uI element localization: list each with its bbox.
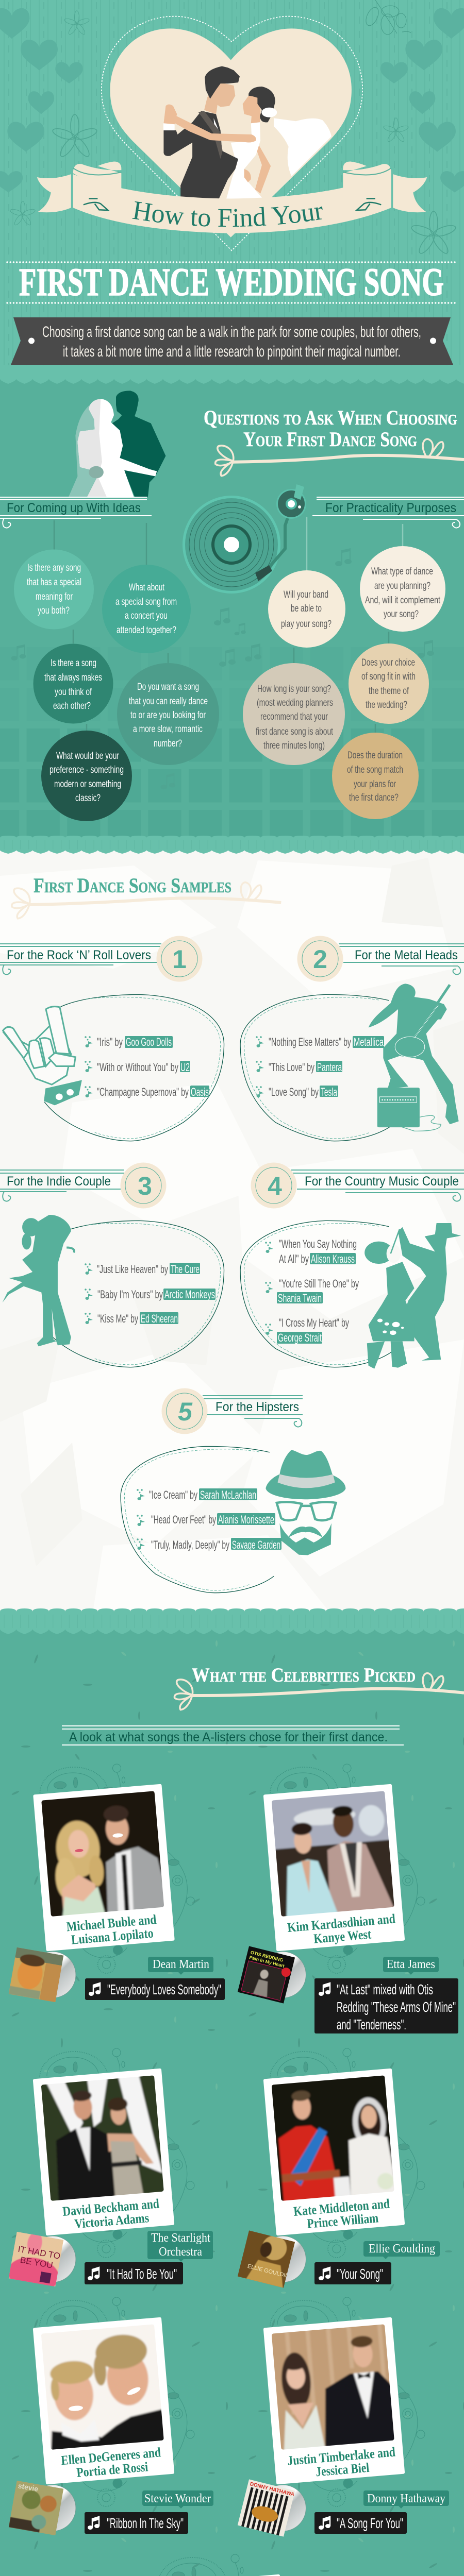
album: Otis Redding	[238, 1946, 306, 2004]
bubble: is there any song: Is there any song	[27, 563, 81, 573]
bubble: makes you think: Is there a song	[51, 658, 96, 669]
category 4 header	[251, 1162, 464, 1209]
subtitle: A look at what songs the A-listers chose for their first dance.	[69, 1730, 388, 1744]
bubble: preference: preference - something	[49, 765, 124, 775]
polaroid: Ellen DeGeneres and Portia de Rossi: Portia de Rossi	[76, 2459, 148, 2480]
illustration: dancing bride and groom	[163, 66, 332, 199]
floral decorations	[40, 1764, 425, 2576]
name label: Ellie Goulding	[363, 2241, 440, 2259]
song box: At Last	[314, 1978, 458, 2033]
song list: indie	[85, 1263, 216, 1325]
heading: how to find your	[132, 201, 323, 227]
heading: samples: First Dance Song Samples	[34, 874, 231, 897]
song list: metal	[256, 1036, 384, 1098]
illustration: country couple	[364, 1223, 461, 1369]
bubble: how long: How long is your song?	[257, 684, 331, 694]
bubble: dance or slow: to or are you looking for	[130, 710, 206, 721]
name label: Stevie Wonder	[142, 2490, 213, 2509]
bubble: preference: classic?	[75, 793, 101, 804]
bubble: concert song: a concert you	[125, 611, 168, 621]
bubble: is there any song: meaning for	[36, 591, 73, 602]
polaroid: David Beckham and Victoria Adams: Victoria Adams	[74, 2210, 150, 2231]
bubble: makes you think	[33, 644, 113, 723]
bubble: makes you think: each other?	[53, 701, 91, 711]
bubble: theme: of song fit in with	[361, 671, 416, 682]
polaroid: Ellen DeGeneres and Portia de Rossi: Ellen DeGeneres and	[60, 2445, 161, 2468]
heading: how to find your: How to Find Your	[132, 201, 323, 227]
polaroid: Kim Kardashian and Kanye West	[263, 1784, 405, 1951]
song list: indie: Ed Sheeran	[141, 1312, 178, 1325]
background flowers and leaves	[10, 0, 457, 256]
panel: questions to ask	[0, 365, 464, 855]
song list: rock: "Iris" by	[97, 1036, 123, 1048]
bubble: dance or slow: Do you want a song	[137, 682, 199, 692]
bubble: band: Will your band	[284, 589, 328, 600]
song list: country: George Strait	[278, 1331, 322, 1344]
cream heart	[110, 28, 352, 238]
bubble: dance or slow: a more slow, romantic	[133, 724, 203, 735]
song list: rock: "With or Without You" by	[97, 1061, 178, 1074]
ribbon bow	[12, 883, 281, 919]
polaroid: Michael Buble and Luisana Lopilato: Luisana Lopilato	[71, 1925, 154, 1947]
category 1 header	[0, 936, 202, 982]
bubble: duration: Does the duration	[347, 750, 403, 761]
heading: questions: Your First Dance Song	[243, 428, 417, 451]
category 3 header: 3	[138, 1172, 152, 1200]
category 1 header: 1	[172, 945, 187, 974]
vinyl record turntable	[183, 484, 306, 594]
name label: Ellie Goulding: Ellie Goulding	[369, 2242, 435, 2256]
strings	[54, 520, 389, 733]
bubble: theme: the wedding?	[366, 700, 407, 710]
dotted rules	[7, 262, 457, 303]
ribbon banner	[37, 162, 427, 233]
song list: country: "You're Still The One" by	[279, 1277, 359, 1290]
bubble: band: play your song?	[281, 619, 332, 630]
song box: A Song For You: "A Song For You"	[337, 2515, 403, 2531]
song list: country: At All" by	[279, 1252, 309, 1265]
album: It Had To Be You: BE YOU	[20, 2255, 54, 2270]
name label: Etta James	[383, 1957, 439, 1975]
bubble: how long: first dance song is about	[256, 726, 334, 737]
category 5 header: 5	[178, 1397, 193, 1426]
song list: rock: Goo Goo Dolls	[126, 1036, 172, 1048]
panel: header	[0, 0, 464, 365]
bubble: type of dance: your song?	[384, 609, 419, 620]
bubble: type of dance: are you planning?	[374, 581, 430, 591]
bubble: concert song: What about	[129, 582, 165, 593]
polaroid: Ellen DeGeneres and Portia de Rossi	[33, 2317, 174, 2484]
name label: Dean Martin	[148, 1957, 213, 1975]
category 4 header: 4	[268, 1172, 282, 1200]
bubble: duration	[332, 733, 419, 819]
name label: Stevie Wonder: Stevie Wonder	[144, 2492, 211, 2505]
category 3 header	[0, 1162, 166, 1209]
song list: rock: U2	[180, 1061, 190, 1074]
panel: first dance song samples	[0, 854, 464, 1613]
bubble: how long: (most wedding planners	[257, 698, 333, 708]
song list: hipsters: Sarah McLachlan	[200, 1488, 256, 1501]
polaroid: Michael Buble and Luisana Lopilato	[33, 1784, 175, 1951]
name label: Donny Hathaway	[363, 2490, 449, 2509]
name label: Etta James: Etta James	[387, 1958, 435, 1971]
bubble: type of dance: And, will it complement	[365, 595, 441, 606]
song list: country: Alison Krauss	[311, 1252, 355, 1265]
bubble: duration: the first dance?	[349, 792, 399, 803]
song list: rock: Oasis	[191, 1086, 209, 1098]
song box: Ribbon In The Sky: "Ribbon In The Sky"	[107, 2515, 184, 2531]
heading: celebrities: What the Celebrities Picked	[192, 1664, 416, 1686]
bubble: type of dance: What type of dance	[371, 566, 433, 577]
bubble: concert song	[102, 565, 191, 653]
illustration: rock hand	[3, 1007, 81, 1105]
polaroid: David Beckham and Victoria Adams: David Beckham and	[62, 2196, 160, 2219]
illustration: indie couple	[3, 1215, 74, 1346]
song list: country	[265, 1238, 359, 1344]
song list: indie: The Cure	[171, 1263, 200, 1276]
song list: hipsters: Alanis Morissette	[218, 1513, 274, 1526]
song list: country: "I Cross My Heart" by	[279, 1316, 349, 1329]
song box: Ribbon In The Sky	[85, 2512, 188, 2534]
ribbon bow	[216, 439, 464, 476]
song list: hipsters: "Truly, Madly, Deeply" by	[151, 1538, 229, 1551]
category 5 header	[162, 1388, 303, 1434]
bubble: how long	[243, 663, 345, 765]
album: Ellie Goulding	[237, 2229, 306, 2292]
polaroid: Kim Kardashian and Kanye West: Kanye West	[313, 1926, 372, 1946]
bubble: makes you think: you think of	[55, 687, 92, 698]
category 5 header: For the Hipsters	[216, 1400, 299, 1414]
song list: metal: Metallica	[354, 1036, 384, 1048]
song list: country: "When You Say Nothing	[279, 1238, 357, 1250]
bubble: dance or slow	[117, 663, 219, 765]
bubble: theme: the theme of	[369, 686, 409, 697]
polaroid: Justin Timberlake and Jessica Biel	[263, 2317, 405, 2484]
song box: Your Song	[314, 2262, 391, 2284]
bubble: preference	[41, 731, 132, 821]
song box: It Had To Be You	[85, 2262, 183, 2284]
bubble: preference: What would be your	[56, 751, 119, 761]
category 1 header: For the Rock ‘N’ Roll Lovers	[7, 948, 151, 962]
polaroid: Kate Middleton and Prince William: Kate Middleton and	[293, 2196, 390, 2219]
polaroid: Kim Kardashian and Kanye West: Kim Kardasdhian and	[287, 1911, 396, 1935]
song list: hipsters	[137, 1488, 281, 1551]
album: Ellie Goulding: ELLIE GOULDING	[247, 2263, 294, 2281]
bubble: dance or slow: that you can really dance	[129, 696, 208, 707]
ribbon bow	[174, 1673, 464, 1710]
song list: indie: Arctic Monkeys	[164, 1288, 215, 1301]
song list: hipsters: "Ice Cream" by	[149, 1488, 197, 1501]
intro banner	[11, 317, 453, 365]
song list: rock: "Champagne Supernova" by	[97, 1086, 189, 1098]
category 2 header: 2	[313, 945, 327, 974]
song box: It Had To Be You: "It Had To Be You"	[107, 2266, 177, 2282]
silhouette couple	[69, 391, 165, 497]
polaroid: Michael Buble and Luisana Lopilato: Michael Buble and	[66, 1912, 157, 1934]
album: Stevie Wonder Ribbon In The Sky: stevie	[18, 2481, 39, 2493]
bubble: band	[268, 570, 345, 648]
album: It Had To Be You	[8, 2232, 76, 2286]
album: Donny Hathaway: DONNY HATHAWAY	[249, 2481, 298, 2499]
album: It Had To Be You: IT HAD TO	[17, 2244, 61, 2261]
polaroid: Justin Timberlake and Jessica Biel: Justin Timberlake and	[287, 2444, 396, 2468]
label: for coming up with ideas	[0, 497, 152, 528]
name label: Dean Martin: Dean Martin	[153, 1958, 209, 1971]
bubble: duration: your plans for	[354, 779, 396, 790]
bubble: concert song: a special song from	[115, 597, 177, 607]
song list: country: Shania Twain	[278, 1292, 322, 1304]
song list: indie: "Kiss Me" by	[97, 1312, 138, 1325]
name label: The Starlight Orchestra	[147, 2231, 213, 2262]
bubble: duration: of the song match	[347, 765, 403, 775]
bubble: theme	[349, 643, 429, 724]
song list: hipsters: "Head Over Feet" by	[151, 1513, 216, 1526]
label: for practicality purposes	[312, 497, 464, 528]
name label: The Starlight Orchestra: Orchestra	[159, 2245, 202, 2259]
category 2 header	[297, 936, 464, 982]
bubble: type of dance	[360, 546, 445, 632]
bubble: how long: recommend that your	[260, 711, 328, 722]
heading: questions	[204, 406, 457, 451]
label: for coming up with ideas: For Coming up With Ideas	[7, 501, 141, 515]
song list: metal: "This Love" by	[269, 1061, 314, 1074]
song box: Everybody Loves Somebody: "Everybody Loves Somebody"	[107, 1981, 221, 1997]
bubble: theme: Does your choice	[361, 657, 415, 668]
polaroid: Kate Middleton and Prince William: Prince William	[306, 2210, 379, 2231]
album: Otis Redding: OTIS REDDING	[250, 1950, 284, 1963]
illustration: metal guitarist	[369, 984, 459, 1131]
song list: indie: "Baby I'm Yours" by	[97, 1288, 163, 1301]
album: Donny Hathaway	[238, 2479, 306, 2537]
bubble: concert song: attended together?	[117, 625, 176, 636]
bubble: band: be able to	[291, 603, 322, 614]
album: Dean Martin	[9, 1947, 76, 2002]
bubble: is there any song: that has a special	[27, 577, 81, 588]
category 3 header: For the Indie Couple	[7, 1174, 111, 1189]
name label: The Starlight Orchestra: The Starlight	[151, 2231, 210, 2245]
illustration: hipster hat glasses beard	[266, 1450, 345, 1555]
background hearts	[0, 8, 464, 193]
bubble: how long: three minutes long)	[263, 740, 325, 751]
list panel outlines	[44, 994, 393, 1593]
song list: metal: "Nothing Else Matters" by	[269, 1036, 351, 1048]
polaroid: Kate Middleton and Prince William	[263, 2069, 405, 2235]
song box: Everybody Loves Somebody	[85, 1978, 225, 2000]
song list: indie: "Just Like Heaven" by	[97, 1263, 168, 1276]
song list: metal: "Love Song" by	[269, 1086, 319, 1098]
bubble: preference: modern or something	[54, 779, 121, 790]
song list: metal: Pantera	[317, 1061, 342, 1074]
dotted heart outline	[102, 16, 362, 250]
panel: what the celebrities picked	[0, 1608, 464, 2576]
song box: At Last: and "Tenderness".	[337, 2016, 406, 2032]
album: Otis Redding: Pain In My Heart	[249, 1955, 285, 1969]
bubble: makes you think: that always makes	[44, 672, 102, 683]
polaroid: Justin Timberlake and Jessica Biel: Jessica Biel	[315, 2460, 370, 2479]
song list: rock	[85, 1036, 209, 1098]
polaroid: David Beckham and Victoria Adams	[33, 2069, 174, 2235]
bubble: is there any song: you both?	[38, 605, 70, 616]
polaroid: Barack Obama and Michelle Robinson	[259, 2574, 280, 2576]
song list: hipsters: Savage Garden	[232, 1538, 280, 1551]
song box: Your Song: "Your Song"	[337, 2266, 383, 2282]
bubble: is there any song	[14, 549, 94, 630]
song box: A Song For You	[314, 2512, 407, 2534]
name label: Donny Hathaway: Donny Hathaway	[367, 2492, 445, 2505]
album: Stevie Wonder Ribbon In The Sky	[9, 2481, 76, 2535]
song list: metal: Tesla	[321, 1086, 337, 1098]
bubble: dance or slow: number?	[154, 738, 182, 749]
